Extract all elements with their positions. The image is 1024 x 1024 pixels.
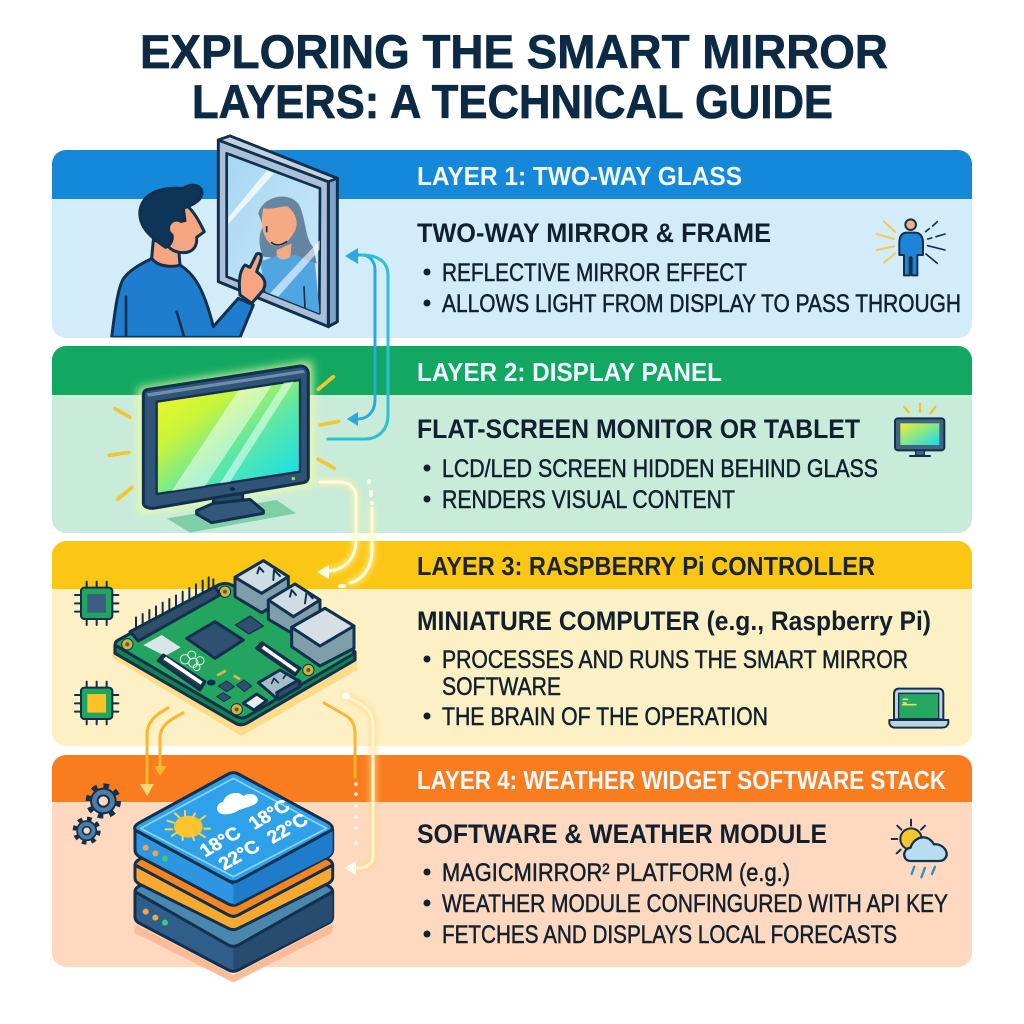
weather temperatures: 22°C: [262, 809, 312, 847]
sun: [166, 811, 210, 840]
layer 4 bullets: FETCHES AND DISPLAYS LOCAL FORECASTS: [442, 921, 897, 949]
layer 2 bullets: RENDERS VISUAL CONTENT: [442, 486, 735, 514]
arrow: controller to software connection, amber: [140, 708, 183, 796]
panel: layer 3 raspberry pi controller: [52, 541, 972, 746]
layer 2 subheading: FLAT-SCREEN MONITOR OR TABLET: [417, 414, 860, 444]
icon: small monitor: [895, 404, 944, 457]
usb and ethernet ports: [235, 561, 354, 710]
bottom server layer: [135, 835, 333, 971]
icon: person with light rays: [877, 219, 945, 275]
raspberry logo: [180, 651, 204, 671]
arrow: display to controller connection, white and yellow: [317, 481, 372, 586]
layer 1 bullets: [424, 259, 961, 318]
weather temperatures: 22°C: [214, 836, 264, 874]
layer 4 bullets: [424, 859, 948, 949]
layer 4 bullets: MAGICMIRROR² PLATFORM (e.g.): [442, 859, 790, 887]
weather temperatures: 18°C: [195, 822, 245, 861]
layer 1 header text: LAYER 1: TWO-WAY GLASS: [417, 161, 742, 191]
cloud: [217, 793, 258, 814]
title: EXPLORING THE SMART MIRROR: [140, 25, 888, 78]
layer 4 header text: LAYER 4: WEATHER WIDGET SOFTWARE STACK: [417, 765, 946, 795]
layer 3 bullets: PROCESSES AND RUNS THE SMART MIRROR: [442, 646, 908, 674]
weather temperatures: [195, 795, 312, 874]
layer 3 subheading: MINIATURE COMPUTER (e.g., Raspberry Pi): [417, 606, 931, 636]
mirror frame: [218, 136, 337, 327]
title: LAYERS: A TECHNICAL GUIDE: [192, 75, 833, 128]
layer 4 illustration: weather server stack: [135, 773, 333, 981]
panel: layer 4 weather widget software stack: [52, 755, 972, 981]
weather temperatures: 18°C: [244, 795, 294, 833]
layer 3 header text: LAYER 3: RASPBERRY Pi CONTROLLER: [417, 551, 875, 581]
layer 2 bullets: LCD/LED SCREEN HIDDEN BEHIND GLASS: [442, 455, 878, 483]
layer 3 bullets: SOFTWARE: [442, 673, 561, 701]
layer 2 illustration: glowing monitor: [109, 362, 339, 533]
arrow: mirror to display connection, blue: [328, 248, 388, 439]
layer 2 bullets: [424, 455, 878, 514]
layer 1 subheading: TWO-WAY MIRROR & FRAME: [417, 218, 771, 248]
layer 3 illustration: raspberry pi board: [115, 561, 355, 733]
icon: sun behind rain cloud: [892, 820, 947, 877]
layer 1 bullets: REFLECTIVE MIRROR EFFECT: [442, 259, 747, 287]
layer 3 bullets: [424, 646, 908, 731]
title: [140, 25, 888, 128]
panel: layer 2 display panel: [52, 346, 972, 533]
top blue weather layer: [135, 773, 333, 905]
icon: green cpu chip: [75, 582, 118, 625]
icon: laptop: [889, 689, 948, 728]
layer 4 subheading: SOFTWARE & WEATHER MODULE: [417, 819, 827, 849]
icon: gears: [75, 786, 119, 843]
layer 1 illustration: person and mirror: [112, 136, 337, 337]
arrow: software to controller connection, amber and dotted: [324, 692, 373, 875]
layer 3 bullets: THE BRAIN OF THE OPERATION: [442, 703, 768, 731]
gpio header: [130, 577, 220, 641]
layer 2 header text: LAYER 2: DISPLAY PANEL: [417, 357, 722, 387]
panel: layer 1 two-way glass: [52, 136, 972, 338]
middle orange layer: [135, 810, 333, 930]
icon: yellow cpu chip: [75, 682, 118, 724]
